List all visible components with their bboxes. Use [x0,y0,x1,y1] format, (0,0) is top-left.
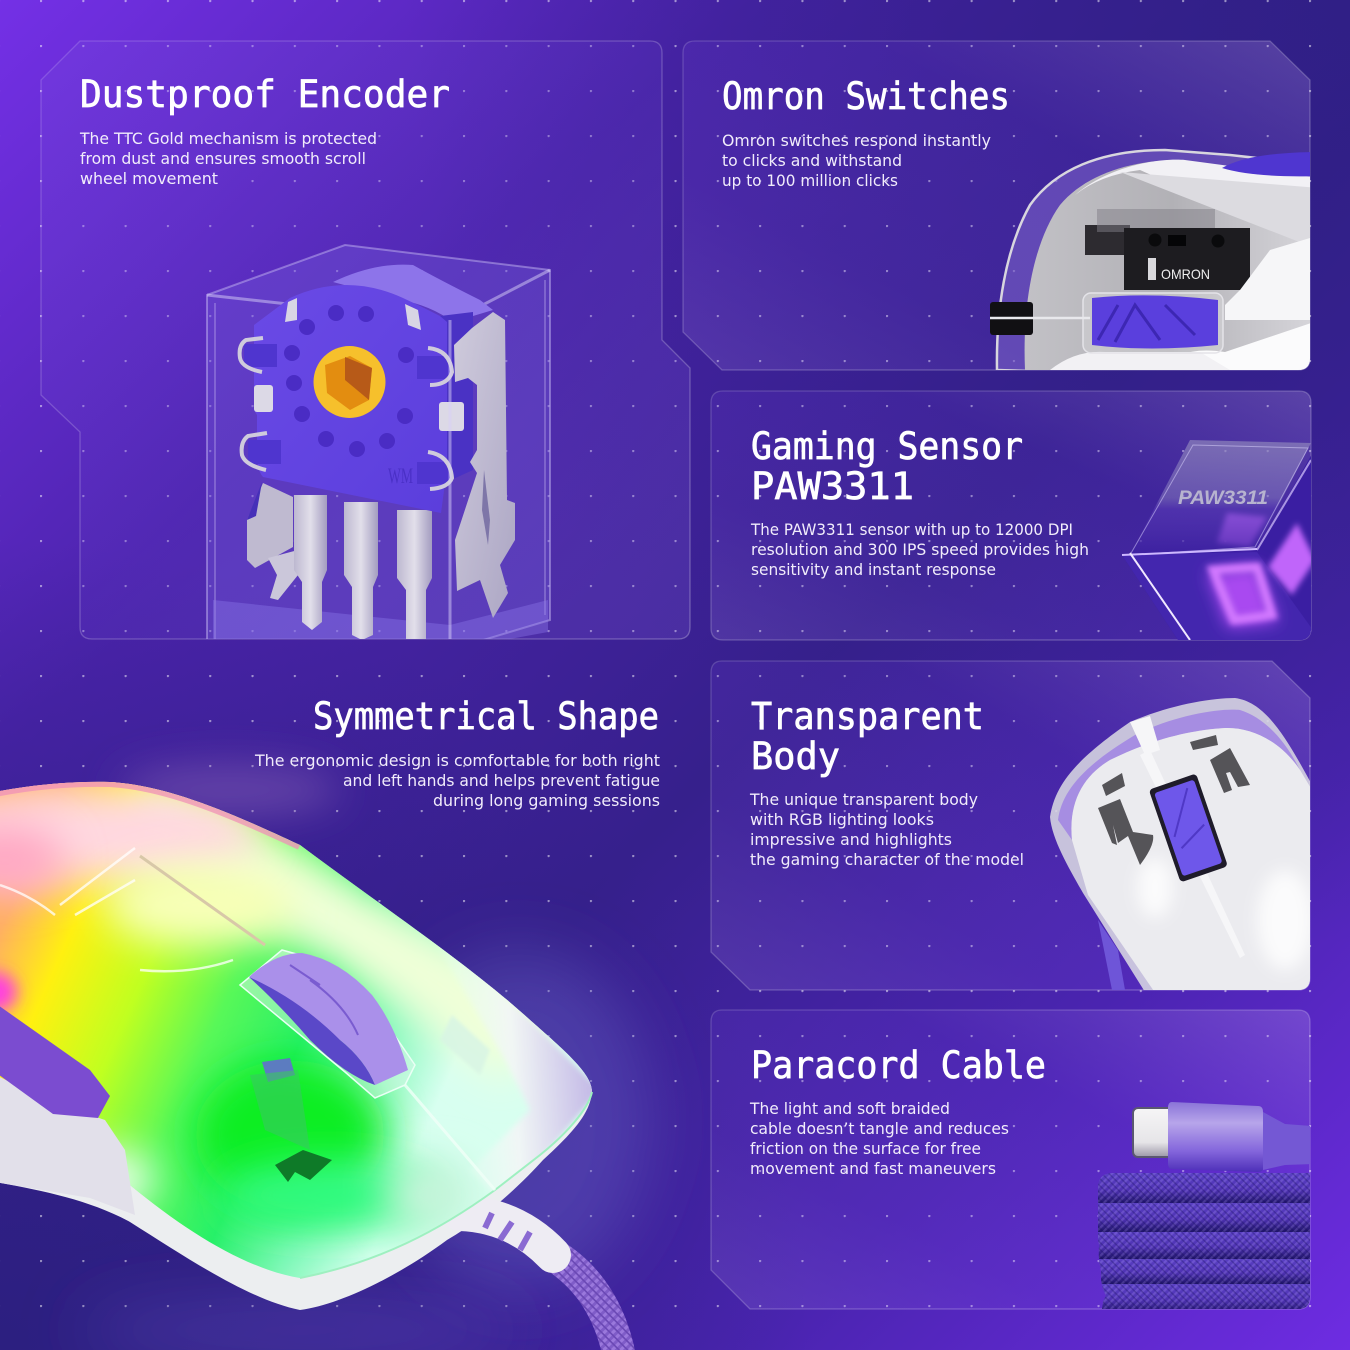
strain relief [460,1213,553,1255]
heading: Omron Switches [722,75,1010,118]
encoder top shell [333,264,493,316]
text block: The light and soft braided [749,1099,950,1118]
encoder side face [440,312,473,485]
glass outline [1050,698,1312,1000]
panel: dustproof encoder [41,41,690,650]
silver left plate [247,483,293,568]
image: sensor chip [1122,440,1320,640]
encoder body [254,285,447,513]
text block: The ergonomic design is comfortable for both right [254,751,660,770]
text block [749,1099,1009,1178]
white front shape [1225,238,1310,320]
lilac band [1058,710,1300,840]
panel background [41,41,690,639]
top glass face [1140,440,1311,548]
text block: Omron switches respond instantly [722,131,991,150]
text block: up to 100 million clicks [722,171,898,190]
black tab [990,302,1033,335]
image: encoder in glass cube: WM [388,463,413,488]
heading: Transparent [751,695,984,738]
text block: cable doesn’t tangle and reduces [750,1119,1009,1138]
text block: movement and fast maneuvers [750,1159,996,1178]
panel: gaming sensor [711,391,1320,640]
glass body colours [0,770,610,1330]
heading [751,695,984,778]
text block [722,131,991,190]
side purple button [1098,920,1125,990]
mouse white base [0,782,592,1310]
tabs [244,344,450,484]
feet [1098,735,1250,865]
text block: impressive and highlights [750,830,952,849]
section: symmetrical shape [254,695,660,810]
inner switch [250,1058,332,1182]
text block: to clicks and withstand [722,151,902,170]
glass highlights [0,848,233,971]
text block: friction on the surface for free [750,1139,981,1158]
heading: Dustproof Encoder [80,73,450,116]
white base [1071,728,1312,1000]
text block: the gaming character of the model [750,850,1024,869]
silver clips [240,338,452,489]
image: mouse cutaway with omron switch [990,150,1320,380]
lower faces [1178,456,1311,640]
pins [294,495,432,645]
panel background [711,391,1311,640]
heading: Paracord Cable [751,1044,1046,1087]
text block [750,520,1089,579]
panel: transparent body [711,661,1313,1000]
panel background [683,41,1310,370]
heading [751,425,1023,508]
heading: Body [751,735,840,778]
side panel and button [0,1003,135,1215]
glass cube [207,245,550,650]
glow [1207,513,1315,628]
scroll wheel [240,950,415,1098]
text block: and left hands and helps prevent fatigue [343,771,660,790]
image: encoder in glass cube [207,245,550,650]
usb-c connector [1133,1102,1312,1172]
image: rgb mouse [0,770,620,1350]
purple sensor pad [1149,773,1228,882]
rear switch dark part [1085,225,1130,255]
text block: wheel movement [80,169,218,188]
centre stripe [1130,716,1245,958]
holes [284,305,414,457]
text block: with RGB lighting looks [750,810,934,829]
glass lines [300,1092,592,1278]
heading: PAW3311 [751,465,914,508]
text block: from dust and ensures smooth scroll [80,149,366,168]
text block: sensitivity and instant response [751,560,996,579]
cable coils [1098,1173,1328,1313]
panel: paracord cable [711,1010,1328,1313]
image: mouse underside [1050,698,1313,1000]
silver right plate [454,312,515,618]
text block: The TTC Gold mechanism is protected [79,129,377,148]
text block: The PAW3311 sensor with up to 12000 DPI [750,520,1073,539]
gold hex shaft [314,346,386,418]
text block: during long gaming sessions [433,791,660,810]
scroll top purple [1222,152,1320,176]
chip label: PAW3311 [1178,488,1268,509]
text block [254,751,660,810]
braided cable [548,1252,620,1350]
text block [749,790,1024,869]
image: braided cable [1098,1102,1328,1313]
panel background [711,1010,1310,1309]
text block [79,129,377,188]
text block: The unique transparent body [749,790,978,809]
panel background [711,661,1310,990]
top pink rim [0,782,300,845]
black omron switch [1124,228,1250,290]
purple wheel [1083,293,1223,353]
black omron switch: OMRON [1161,266,1210,282]
mouse shell [997,150,1320,380]
heading: Gaming Sensor [751,425,1023,468]
heading: Symmetrical Shape [313,695,659,738]
panel: omron switches [683,41,1320,380]
text block: resolution and 300 IPS speed provides high [751,540,1089,559]
